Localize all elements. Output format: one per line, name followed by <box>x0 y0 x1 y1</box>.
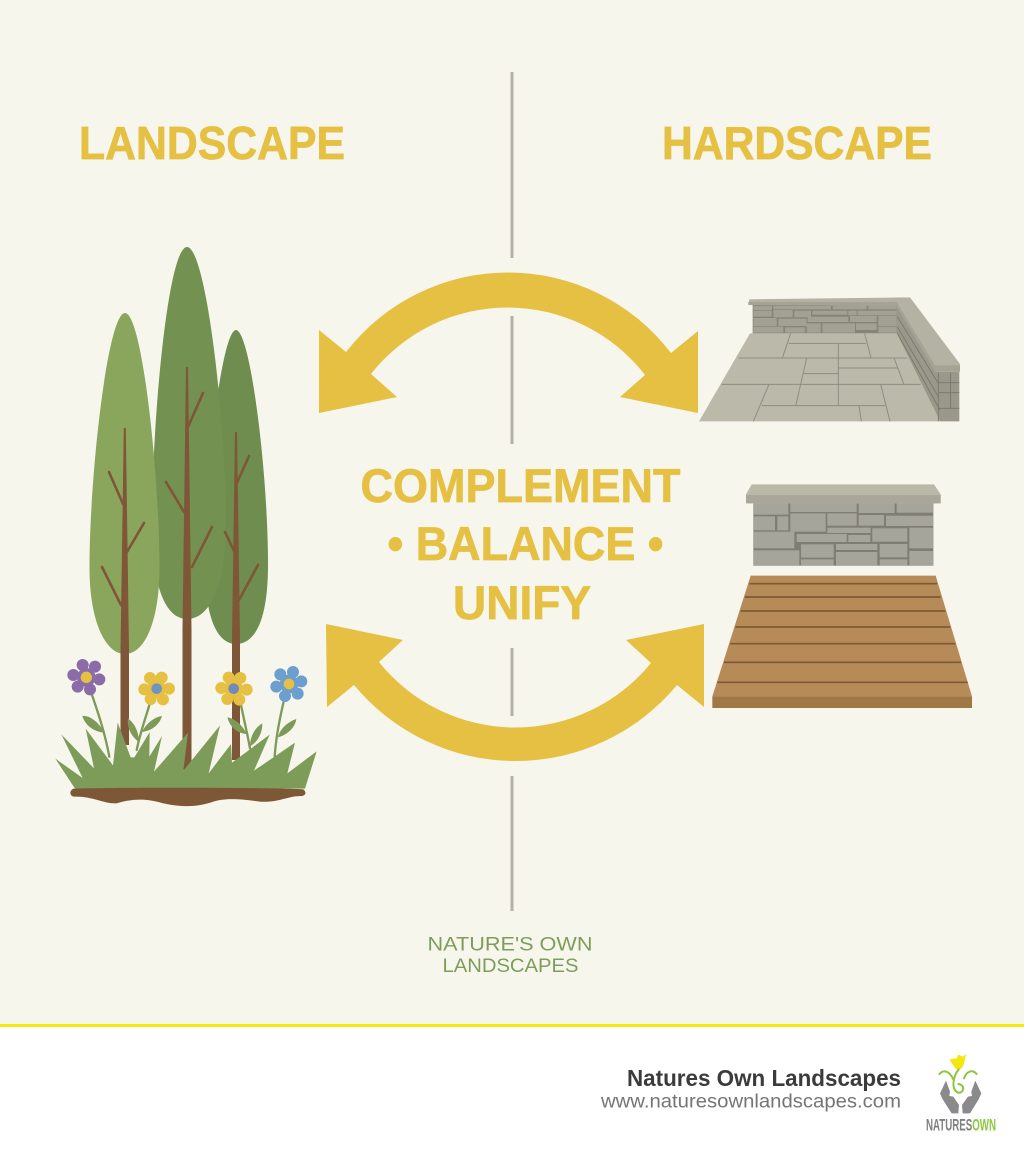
heading: hardscape: HARDSCAPE <box>662 117 932 169</box>
logo tulip <box>949 1054 966 1069</box>
flower: yellow right <box>215 672 253 706</box>
soil <box>70 788 305 806</box>
tree trunks and branches <box>120 367 240 770</box>
deck boards <box>712 576 972 696</box>
wall cap <box>748 297 960 372</box>
footer company name: Natures Own Landscapes <box>627 1065 901 1091</box>
right wall <box>897 306 959 421</box>
tree: right <box>205 330 268 644</box>
footer band <box>0 1027 1024 1154</box>
wall cap <box>746 484 941 503</box>
flower: blue <box>270 666 307 702</box>
center text: complement balance unify <box>360 459 681 629</box>
logo wordmark: NATURESOWN <box>926 1116 996 1135</box>
heading: landscape: LANDSCAPE <box>79 117 345 169</box>
brand caption: NATURE'S OWN <box>428 934 592 956</box>
center text: complement balance unify: UNIFY <box>453 576 591 629</box>
logo sprout <box>939 1069 977 1093</box>
center text: complement balance unify: COMPLEMENT <box>360 459 681 512</box>
flower stems and leaves <box>92 695 284 757</box>
paving joints <box>722 333 921 421</box>
tree: left <box>89 313 160 654</box>
flower: yellow left <box>138 672 175 705</box>
illustration: stone wall and timber deck <box>712 484 972 708</box>
brand caption: LANDSCAPES <box>442 956 578 977</box>
center text: complement balance unify: • BALANCE • <box>388 517 664 570</box>
arrow: top double-headed arc <box>319 272 698 413</box>
illustration: trees and flowers <box>55 247 317 806</box>
brand caption <box>428 934 592 977</box>
stone wall <box>753 503 933 566</box>
grass tuft <box>55 723 317 789</box>
footer url: www.naturesownlandscapes.com <box>600 1090 901 1112</box>
deck joints <box>717 584 968 682</box>
flower: purple <box>67 659 105 695</box>
deck front edge <box>712 696 972 708</box>
tree: middle <box>152 247 226 619</box>
illustration: stone patio with wall <box>699 297 960 421</box>
flowers and grass <box>55 659 317 806</box>
arrow: bottom double-headed arc <box>326 624 704 761</box>
patio floor <box>699 333 940 421</box>
back wall <box>753 305 897 333</box>
logo hands <box>940 1081 959 1113</box>
footer logo <box>926 1054 996 1135</box>
